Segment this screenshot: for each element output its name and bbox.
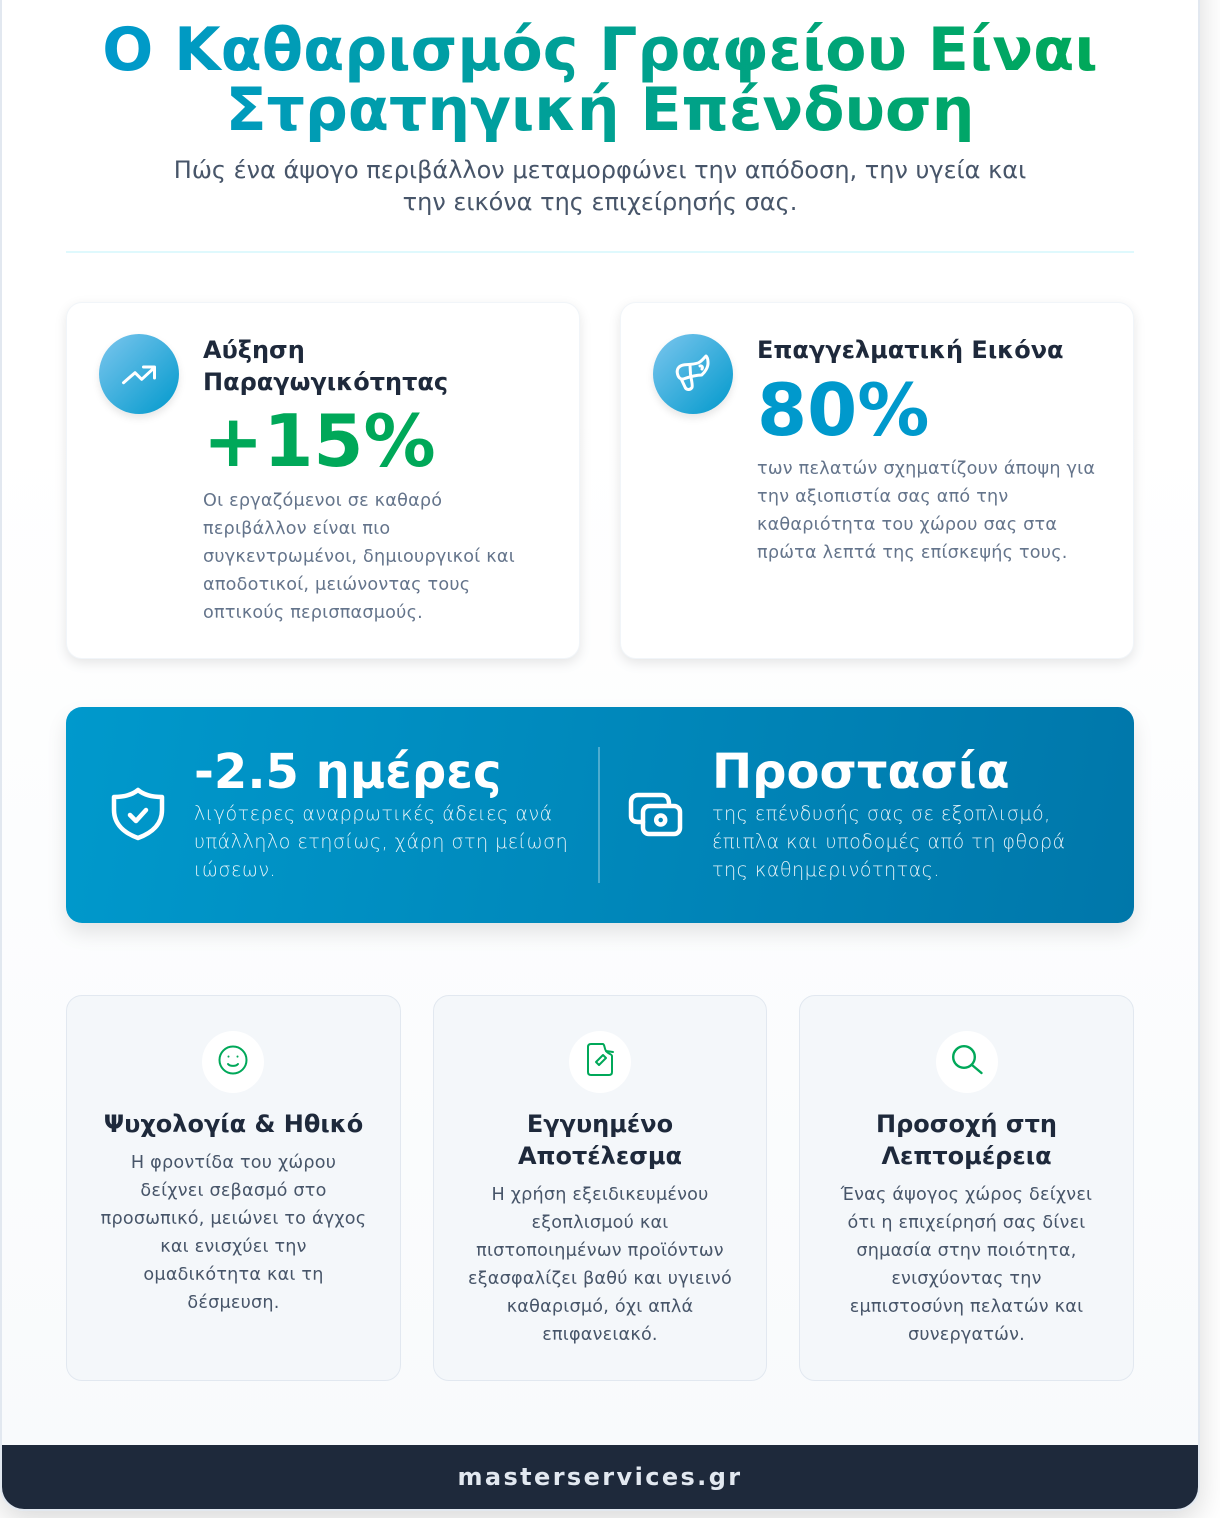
subtitle: Πώς ένα άψογο περιβάλλον μεταμορφώνει την απόδοση, την υγεία και [174, 156, 1026, 184]
title: Στρατηγική Επένδυση [226, 75, 974, 145]
text: professional image: καθαριότητα του χώρου σας στα [757, 515, 1057, 535]
text: protection: της καθημερινότητας. [712, 858, 940, 881]
heading: Ψυχολογία & Ηθικό [104, 1110, 363, 1138]
panel: productivity [66, 302, 580, 659]
text: εμπιστοσύνη πελατών και [850, 1297, 1083, 1317]
heading: productivity: Παραγωγικότητας [203, 368, 448, 396]
text: σημασία στην ποιότητα, [856, 1241, 1077, 1261]
text: Ένας άψογος χώρος δείχνει [841, 1185, 1092, 1205]
text: productivity: συγκεντρωμένοι, δημιουργικοί και [203, 547, 515, 567]
heading [876, 1110, 1057, 1170]
text: δέσμευση. [187, 1293, 280, 1313]
subtitle [174, 156, 1026, 216]
icon: smile [202, 1031, 264, 1093]
heading: productivity [203, 336, 448, 396]
heading: Προσοχή στη [876, 1110, 1057, 1138]
text: productivity: οπτικούς περισπασμούς. [203, 603, 423, 623]
text: Η φροντίδα του χώρου [131, 1153, 336, 1173]
icon: shield [112, 788, 164, 840]
icon: trending up [99, 334, 179, 414]
text: productivity: περιβάλλον είναι πιο [203, 519, 390, 539]
title [0, 20, 1200, 142]
text: -2.5 days: ιώσεων. [194, 858, 276, 881]
icon: megaphone [653, 334, 733, 414]
text: πιστοποιημένων προϊόντων [476, 1241, 724, 1261]
icon: magnifier [936, 1031, 998, 1093]
panel: professional image [620, 302, 1134, 659]
text: ενισχύοντας την [891, 1269, 1042, 1289]
text: productivity [203, 491, 515, 623]
stat: 80%: 80% [757, 368, 929, 452]
panel: psychology [66, 995, 401, 1381]
text: protection: έπιπλα και υποδομές από τη φθορά [712, 830, 1066, 853]
footer: masterservices.gr [457, 1463, 743, 1491]
text: συνεργατών. [908, 1325, 1025, 1345]
heading [518, 1110, 682, 1170]
text: professional image: των πελατών σχηματίζουν άποψη για [757, 459, 1095, 479]
panel: guaranteed result [433, 995, 767, 1381]
text: ομαδικότητα και τη [143, 1265, 324, 1285]
panel: blue band [66, 707, 1134, 923]
text: -2.5 days: λιγότερες αναρρωτικές άδειες ανά [194, 802, 553, 825]
text: δείχνει σεβασμό στο [140, 1181, 327, 1201]
text: Η χρήση εξειδικευμένου [491, 1185, 709, 1205]
text: protection [712, 802, 1066, 881]
text: professional image: πρώτα λεπτά της επίσκεψής τους. [757, 543, 1068, 563]
text: productivity: Οι εργαζόμενοι σε καθαρό [203, 491, 442, 511]
text: ότι η επιχείρησή σας δίνει [848, 1213, 1085, 1233]
subtitle: την εικόνα της επιχείρησής σας. [403, 188, 797, 216]
text: προσωπικό, μειώνει το άγχος [101, 1209, 366, 1229]
text: protection: της επένδυσής σας σε εξοπλισμό, [712, 802, 1051, 825]
text: επιφανειακό. [542, 1325, 658, 1345]
text: professional image: την αξιοπιστία σας από την [757, 487, 1008, 507]
heading: Εγγυημένο [527, 1110, 673, 1138]
footer [2, 1445, 1198, 1509]
heading: protection: Προστασία [712, 744, 1010, 800]
heading: productivity: Αύξηση [203, 336, 305, 364]
heading: Αποτέλεσμα [518, 1142, 682, 1170]
heading: Λεπτομέρεια [881, 1142, 1052, 1170]
text [101, 1153, 366, 1313]
text: -2.5 days [194, 802, 568, 881]
text [840, 1185, 1092, 1345]
title: Ο Καθαρισμός Γραφείου Είναι [102, 15, 1098, 85]
heading: professional image: Επαγγελματική Εικόνα [757, 336, 1064, 364]
panel: attention to detail [799, 995, 1134, 1381]
icon: cash [628, 792, 682, 836]
text: εξοπλισμού και [532, 1213, 668, 1233]
text: professional image [757, 459, 1095, 563]
icon: document [569, 1031, 631, 1093]
text: εξασφαλίζει βαθύ και υγιεινό [468, 1269, 732, 1289]
text: καθαρισμό, όχι απλά [507, 1297, 693, 1317]
text: productivity: αποδοτικοί, μειώνοντας τους [203, 575, 470, 595]
stat: -2.5 days: -2.5 ημέρες [194, 744, 501, 800]
stat: +15%: +15% [203, 399, 436, 483]
text: -2.5 days: υπάλληλο ετησίως, χάρη στη μείωση [194, 830, 568, 853]
text: και ενισχύει την [160, 1237, 307, 1257]
text [468, 1185, 732, 1345]
